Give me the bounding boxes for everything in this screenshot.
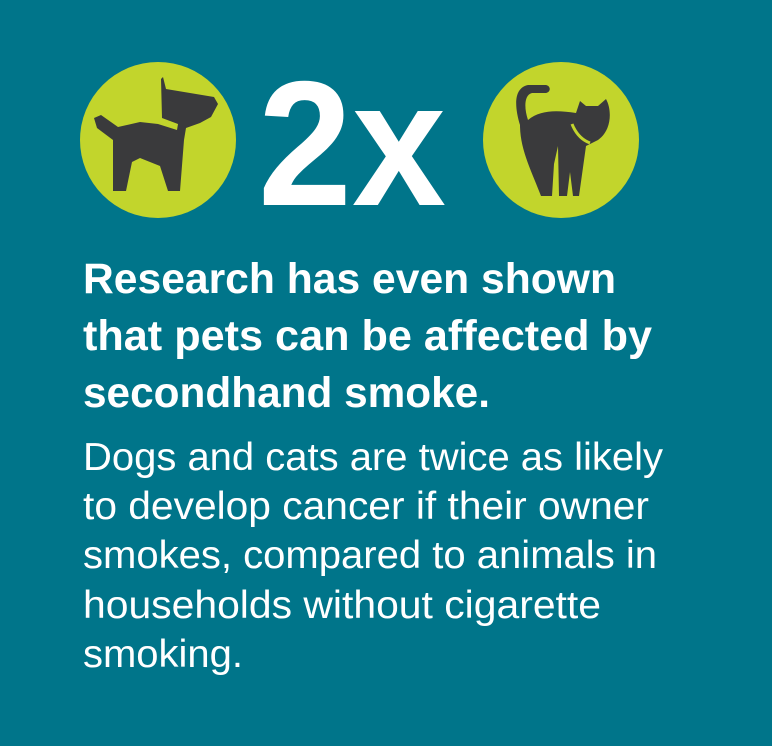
body text: households without cigarette — [83, 584, 601, 627]
body text: smoking. — [83, 633, 243, 676]
body text — [83, 436, 664, 676]
headline: secondhand smoke. — [83, 369, 490, 417]
headline — [83, 255, 652, 417]
body text: Dogs and cats are twice as likely — [83, 436, 664, 479]
icon: cat — [483, 62, 639, 218]
headline: that pets can be affected by — [83, 312, 652, 360]
body text: to develop cancer if their owner — [83, 485, 649, 528]
body text: smokes, compared to animals in — [83, 534, 657, 577]
headline: Research has even shown — [83, 255, 616, 303]
icon: dog — [80, 62, 236, 218]
big number 2x: 2x — [258, 44, 446, 243]
